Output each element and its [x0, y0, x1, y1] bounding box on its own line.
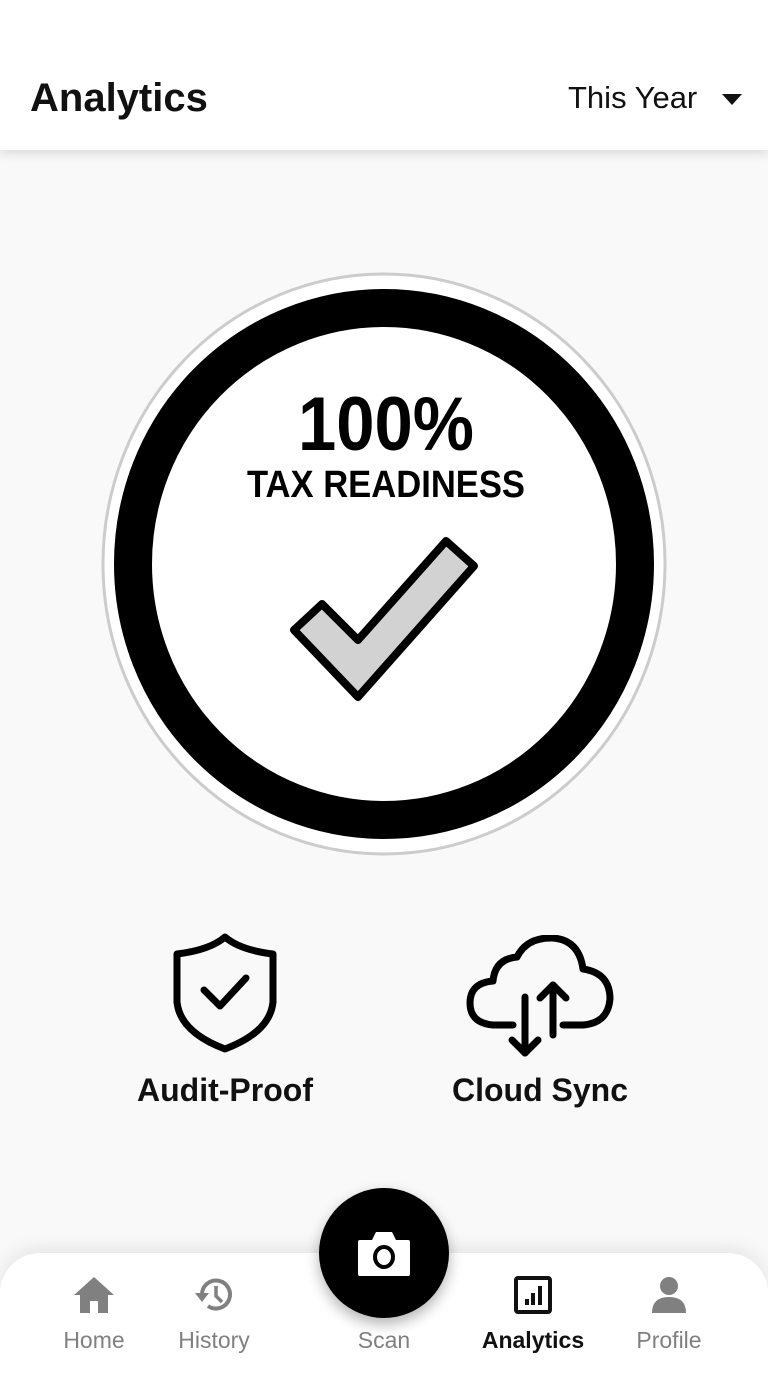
scan camera button: [319, 1188, 449, 1318]
feature: audit-proof: [137, 934, 314, 1108]
feature: cloud sync: [452, 935, 628, 1108]
bottom navigation: [0, 1253, 768, 1383]
nav: analytics (active): Analytics: [482, 1327, 584, 1353]
label: Audit-Proof: [137, 1072, 313, 1108]
nav: home: Home: [63, 1327, 125, 1353]
nav: home: [63, 1277, 125, 1353]
icon: shield: [174, 934, 276, 1052]
readiness gauge: [102, 272, 666, 856]
nav: history: [178, 1278, 250, 1353]
nav: profile: Profile: [636, 1327, 702, 1353]
nav: history: History: [178, 1327, 250, 1353]
readiness gauge: 100%: [298, 382, 474, 467]
label: Cloud Sync: [452, 1072, 628, 1108]
readiness gauge: TAX READINESS: [247, 464, 525, 506]
icon: camera: [358, 1232, 410, 1276]
nav: analytics (active): [482, 1276, 584, 1353]
title: Analytics: [30, 76, 208, 120]
nav: scan: Scan: [358, 1327, 410, 1353]
period dropdown: This Year: [568, 80, 697, 115]
icon: cloud sync: [466, 935, 614, 1056]
nav: profile: [636, 1277, 702, 1353]
header bar: [0, 0, 768, 150]
